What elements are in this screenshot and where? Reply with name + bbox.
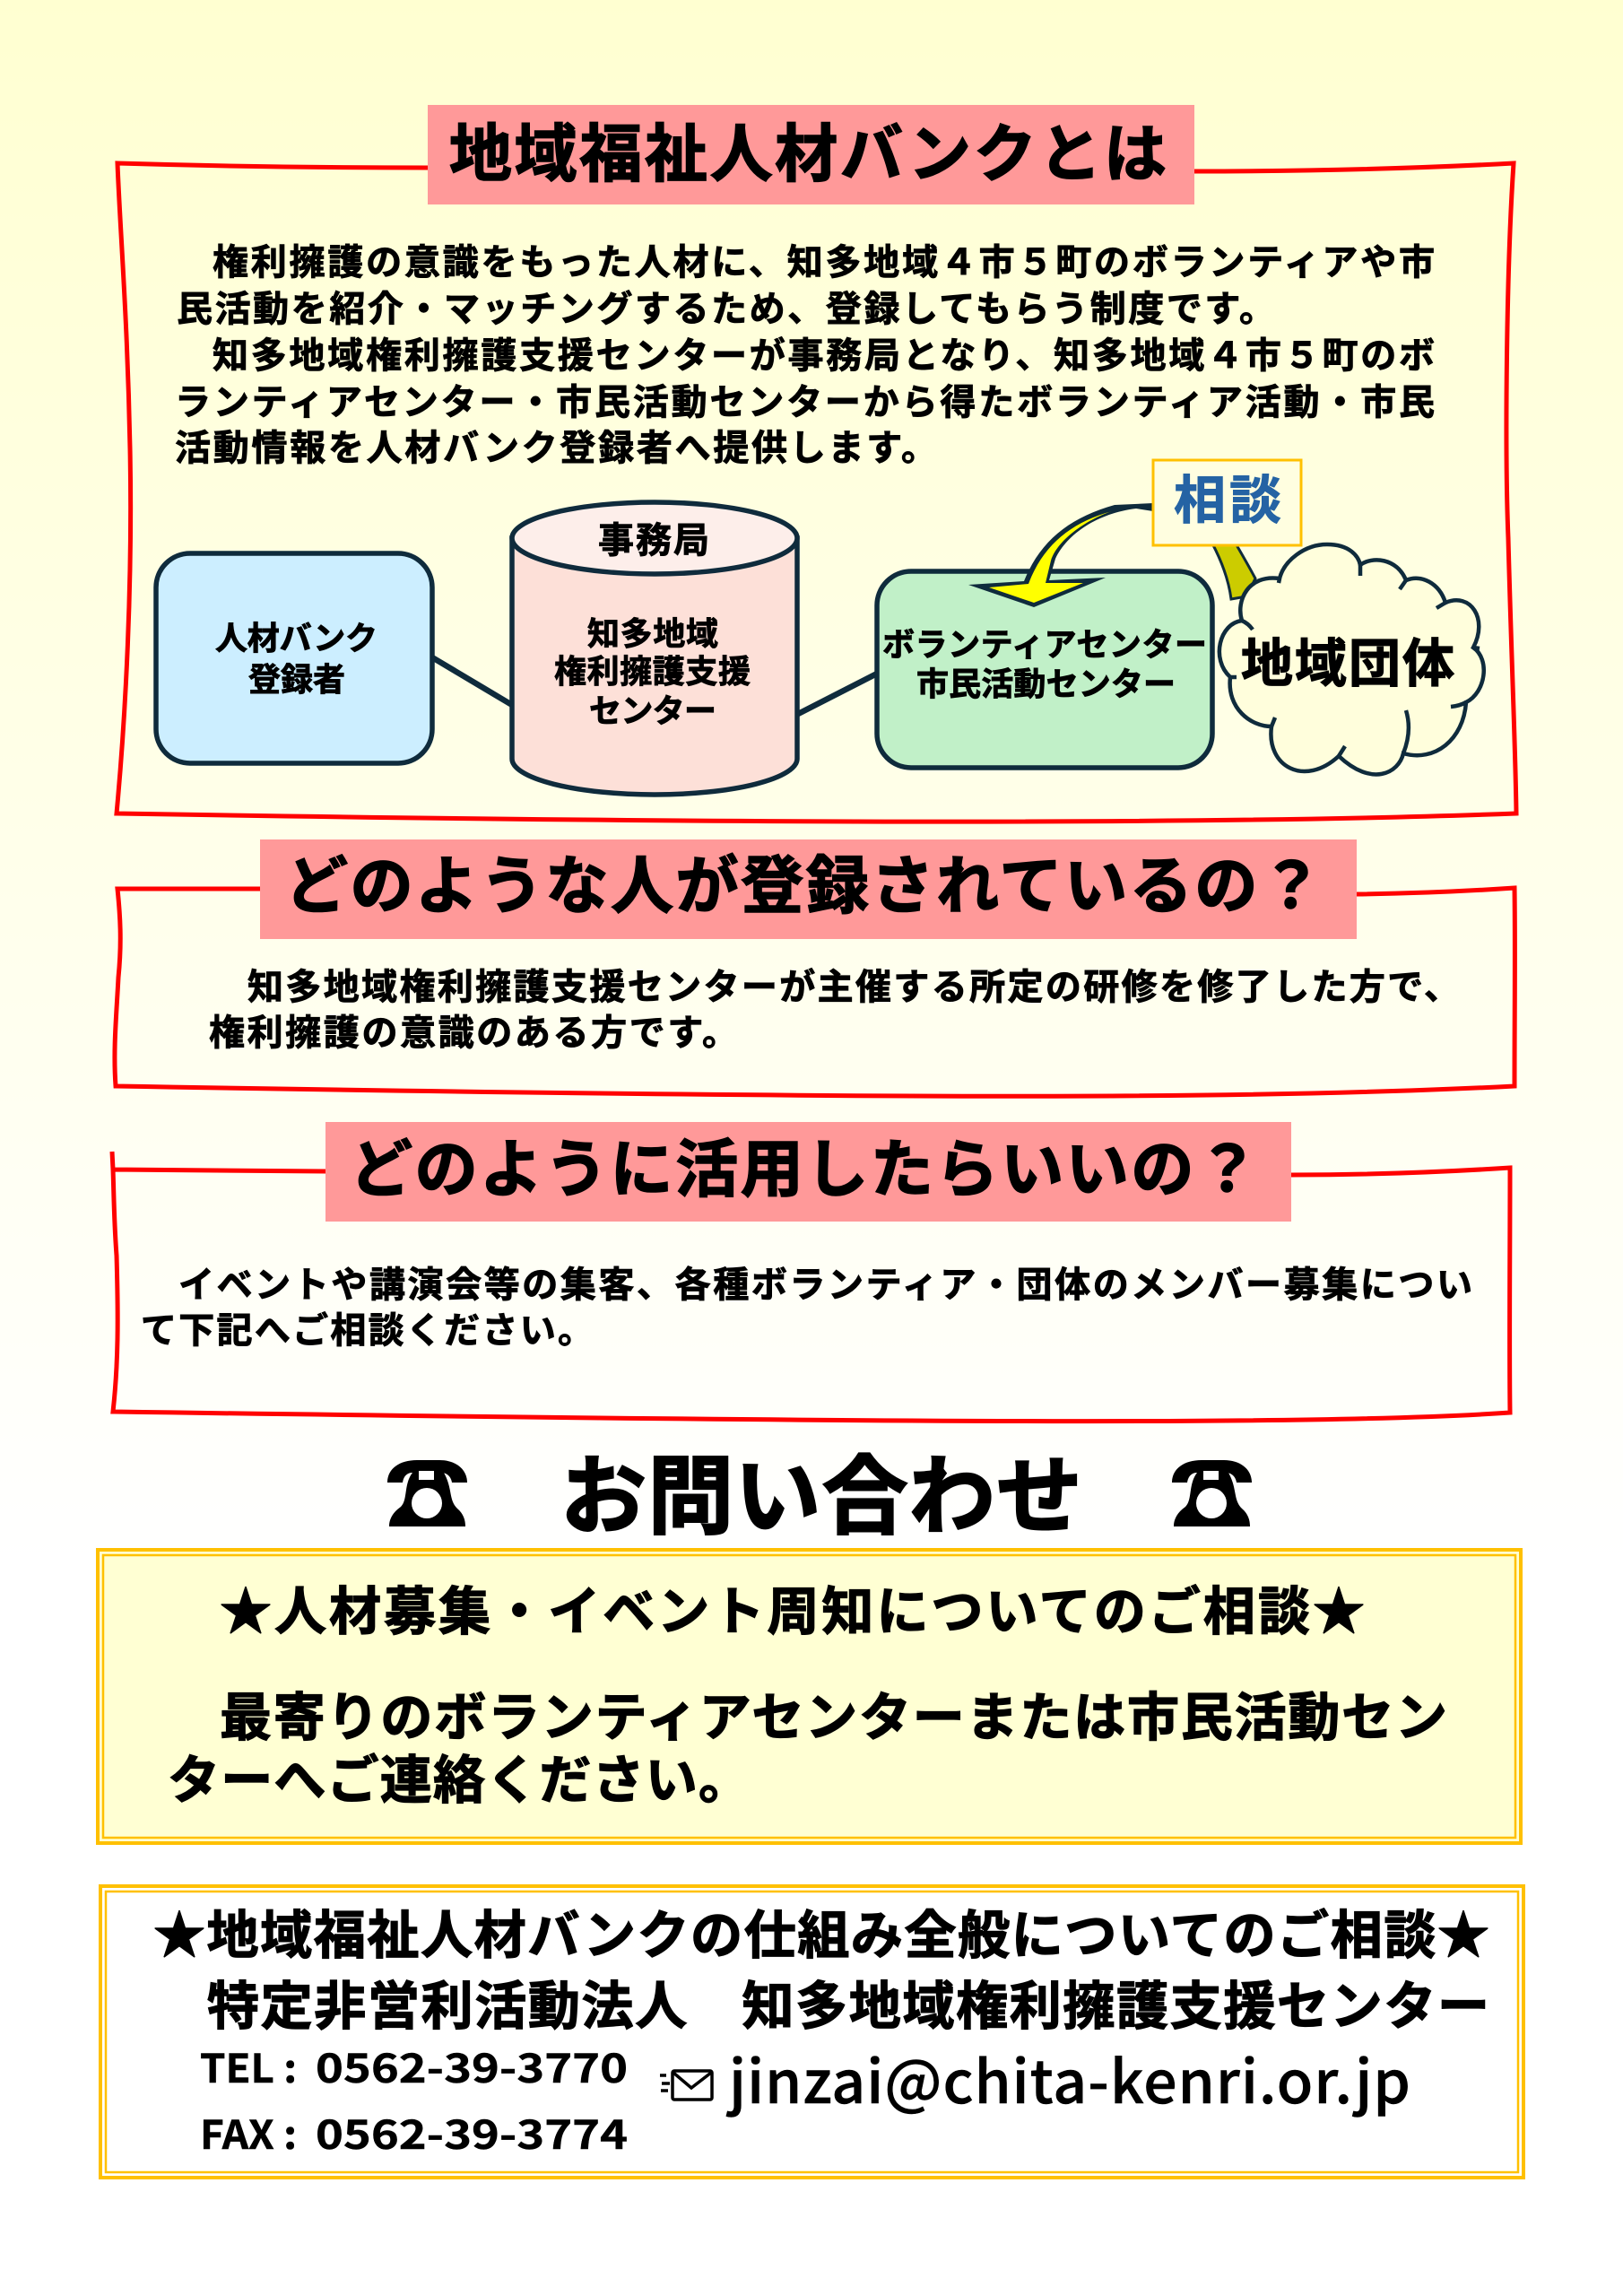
text: fax number: FAX : [200,2103,297,2161]
box: registered members: 人材バンク [215,620,378,657]
text block: description [175,243,1435,468]
heading: どのように活用したらいいの？ [325,1122,1291,1222]
text block: usage: イベントや講演会等の集客、各種ボランティア・団体のメンバー募集につい [178,1265,1472,1305]
callout: 相談 [1153,460,1301,545]
text block: description: 民活動を紹介・マッチングするため、登録してもらう制度です。 [177,290,1275,329]
panel: recruitment consultation [98,1550,1521,1843]
cylinder: secretariat: 知多地域 [587,615,718,652]
icon: mail [660,2071,712,2100]
arrow: consultation [968,503,1153,607]
text: consultation body [168,1689,1447,1810]
heading: どのような人が登録されているの？: どのような人が登録されているの？ [285,851,1323,921]
text block: usage [141,1265,1472,1351]
icon: telephone left [387,1460,467,1526]
heading: contact with phone icons [387,1449,1252,1545]
text: telephone number: TEL : [200,2037,297,2094]
text: email address: jinzai@chita-kenri.or.jp [725,2035,1410,2121]
text: fax number: 0562-39-3774 [316,2103,628,2161]
text: telephone number: 0562-39-3770 [316,2037,628,2094]
text block: registered people: 権利擁護の意識のある方です。 [209,1013,738,1053]
connector lines [432,657,877,714]
heading: 地域福祉人材バンクとは [428,105,1194,204]
text: consultation body: ターへご連絡ください。 [168,1752,751,1810]
strip behind the cloud [1212,544,1255,599]
box: registered members [156,553,432,763]
box: volunteer and civic activity centers: ボランティアセンター [882,626,1207,663]
box: volunteer and civic activity centers: 市民活動センター [916,665,1176,702]
box: volunteer and civic activity centers [877,571,1212,768]
heading: どのように活用したらいいの？: どのように活用したらいいの？ [350,1135,1259,1205]
panel: organisation contact [100,1886,1523,2178]
text block: usage: て下記へご相談ください。 [141,1311,594,1351]
panel: how to use [112,1122,1510,1422]
text: telephone number [200,2037,628,2094]
title: お問い合わせ: お問い合わせ [560,1449,1082,1545]
text block: description: 権利擁護の意識をもった人材に、知多地域４市５町のボランティアや市 [213,243,1435,283]
text: consultation heading: ★人材募集・イベント周知についてのご相談★ [220,1583,1365,1641]
text block: description: ランティアセンター・市民活動センターから得たボランティア活動・市民 [175,383,1435,422]
text block: registered people: 知多地域権利擁護支援センターが主催する所定の研修を修了した方で、 [247,968,1460,1007]
cloud: community groups [1219,544,1484,774]
red hand-drawn frame 1 [117,163,1516,822]
cylinder: secretariat: 事務局 [598,521,709,561]
cylinder: secretariat: センター [589,692,716,729]
cylinder: secretariat: 権利擁護支援 [554,653,751,690]
text: organisation name: 特定非営利活動法人 知多地域権利擁護支援センター [207,1978,1489,2036]
cylinder: secretariat [512,502,797,795]
text block: description: 知多地域権利擁護支援センターが事務局となり、知多地域４市５町のボ [213,336,1435,376]
text: fax number [200,2103,628,2161]
red hand-drawn frame 3 [112,1152,1510,1422]
icon: telephone right [1172,1460,1252,1526]
red hand-drawn frame 2 [115,888,1515,1096]
panel: who is registered [115,839,1515,1096]
panel: about the talent bank [117,105,1516,822]
text block: description: 活動情報を人材バンク登録者へ提供します。 [175,429,937,468]
box: registered members: 登録者 [248,661,345,698]
text: consultation body: 最寄りのボランティアセンターまたは市民活動セン [220,1689,1447,1747]
callout: 相談: 相談 [1174,472,1281,530]
cloud: community groups: 地域団体 [1241,635,1454,693]
heading: 地域福祉人材バンクとは: 地域福祉人材バンクとは [449,119,1167,189]
heading: どのような人が登録されているの？ [260,839,1357,939]
text: system consultation heading: ★地域福祉人材バンクの仕組み全般についてのご相談★ [153,1907,1489,1965]
text block: registered people [209,968,1460,1053]
